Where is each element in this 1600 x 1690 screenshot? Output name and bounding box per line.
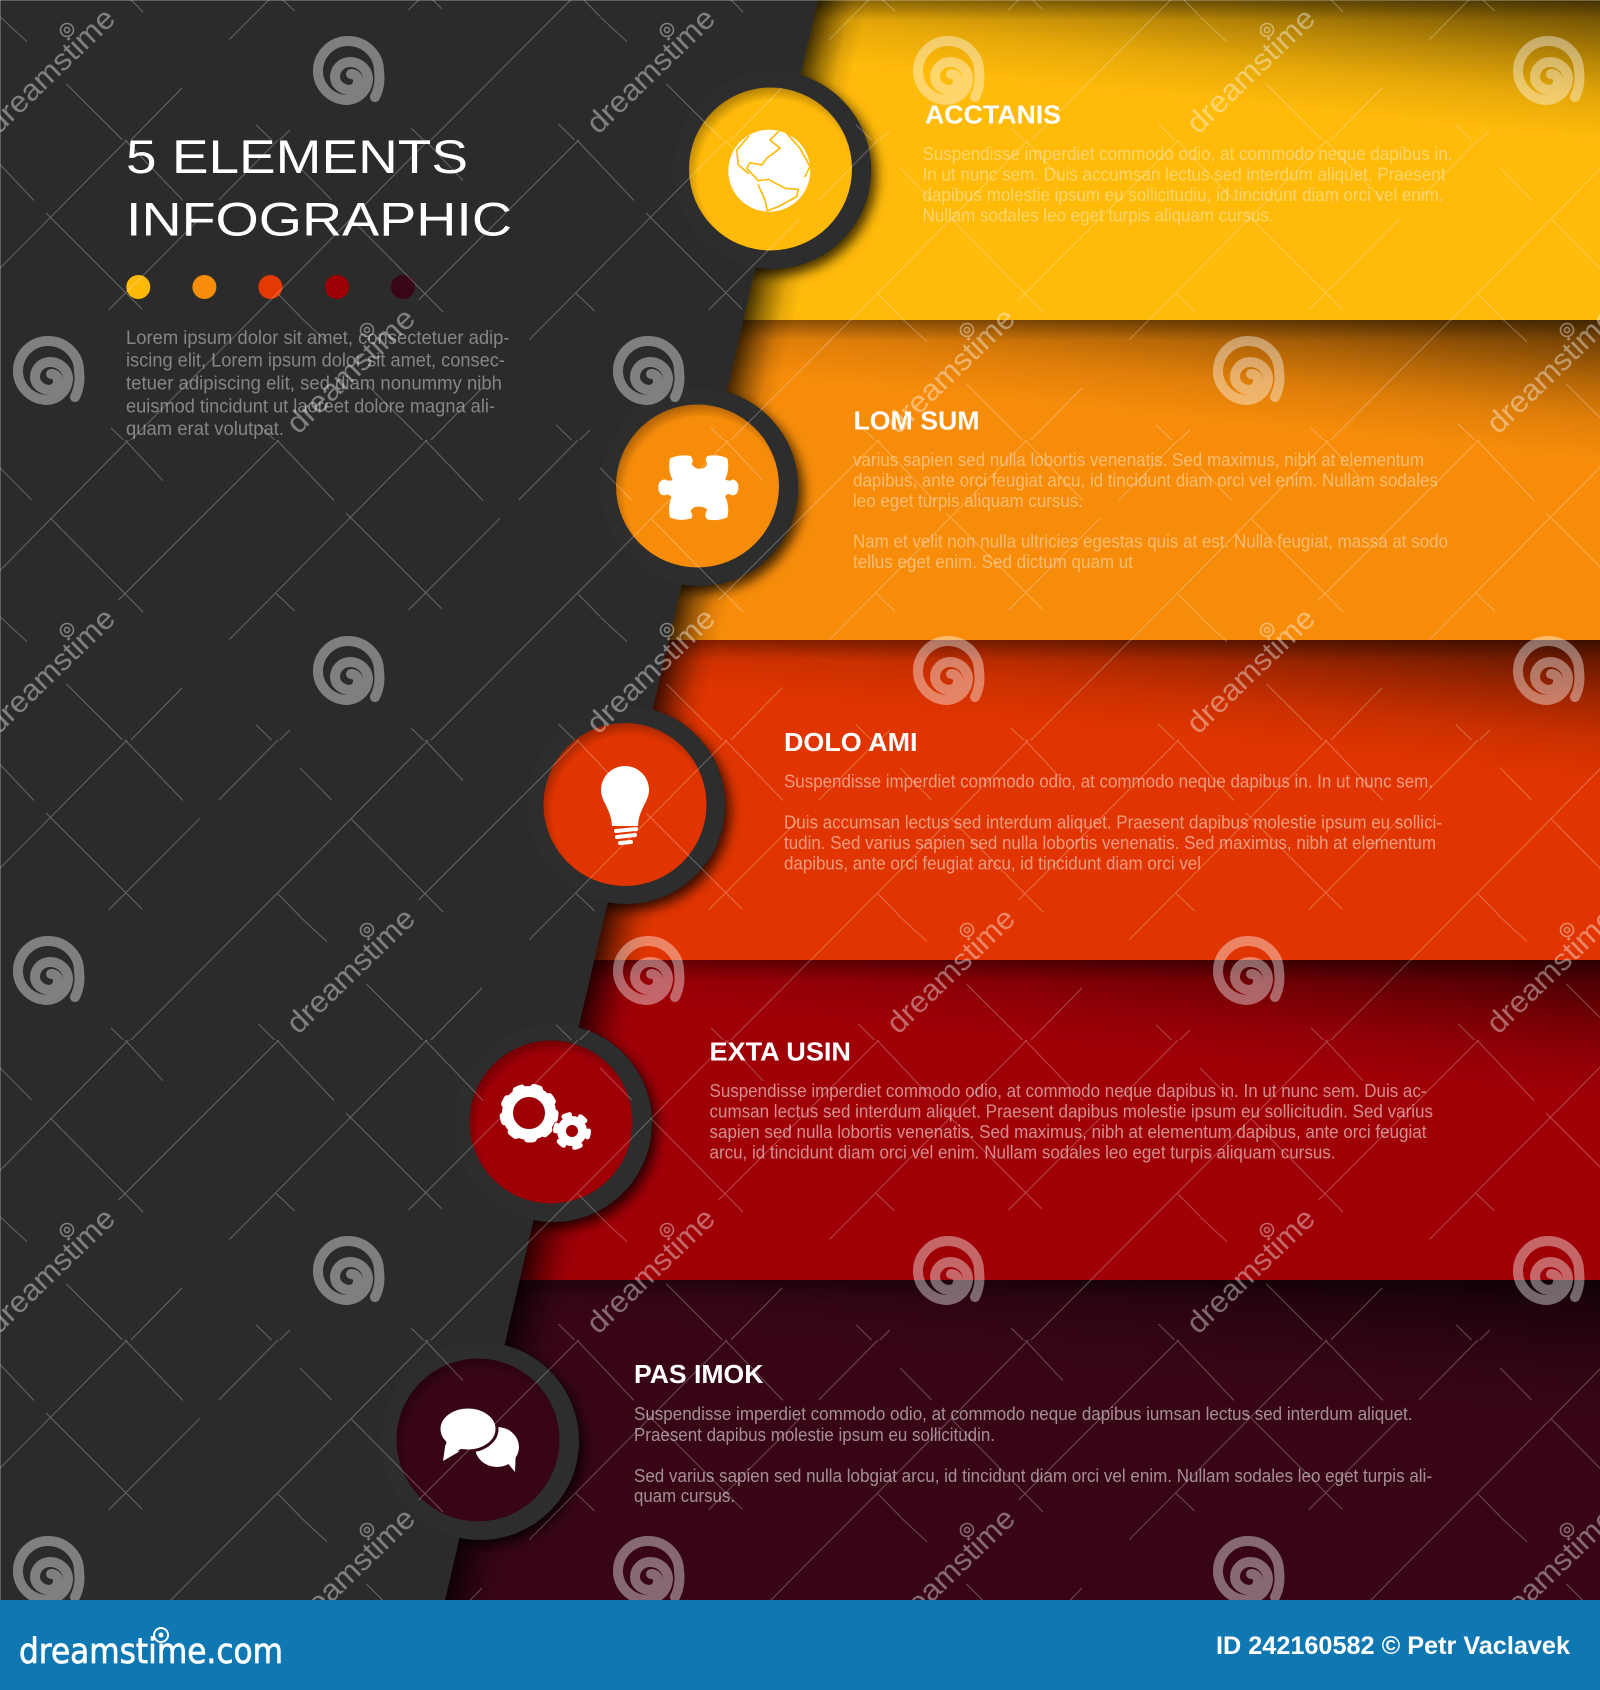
text block: intro: quam erat volutpat.: [126, 418, 284, 440]
colour dots legend: [126, 275, 415, 299]
text block: intro: Lorem ipsum dolor sit amet, consectetuer adip-: [126, 327, 510, 349]
text block: EXTA USIN body: sapien sed nulla lobortis venenatis. Sed maximus, nibh at elementum dapibus, ante orci feugiat: [710, 1122, 1426, 1142]
text block: intro: [126, 327, 510, 440]
footer credit: ID 242160582 © Petr Vaclavek: [1216, 1632, 1570, 1660]
circle badge: puzzle: [600, 388, 798, 586]
text block: LOM SUM body: dapibus, ante orci feugiat arcu, id tincidunt diam orci vel enim. Nullam sodales: [853, 470, 1438, 490]
text block: EXTA USIN body: cumsan lectus sed interdum aliquet. Praesent dapibus molestie ipsum eu sollicitudin. Sed varius: [710, 1102, 1433, 1122]
text block: DOLO AMI body: Suspendisse imperdiet commodo odio, at commodo neque dapibus in. In ut nunc sem.: [784, 772, 1433, 792]
text block: PAS IMOK body: Praesent dapibus molestie ipsum eu sollicitudin.: [634, 1425, 995, 1445]
title: 5 ELEMENTS: [126, 130, 468, 183]
icon: light bulb: [601, 766, 649, 843]
heading: EXTA USIN: EXTA USIN: [710, 1036, 851, 1066]
watermark overlay: dreamstime: [280, 902, 422, 1040]
watermark overlay: dreamstime: [280, 302, 422, 440]
watermark overlay: dreamstime: [1180, 1202, 1322, 1340]
watermark overlay: dreamstime: [580, 602, 722, 740]
title: [126, 130, 512, 246]
text block: DOLO AMI body: dapibus, ante orci feugiat arcu, id tincidunt diam orci vel: [784, 854, 1201, 874]
text block: intro: iscing elit, Lorem ipsum dolor sit amet, consec-: [126, 350, 505, 372]
text block: DOLO AMI body: [784, 772, 1442, 874]
footer logo: dreamstime.com: [19, 1632, 283, 1672]
watermark overlay: dreamstime: [580, 2, 722, 140]
text block: ACCTANIS body: Suspendisse imperdiet commodo odio, at commodo neque dapibus in.: [922, 144, 1452, 164]
text block: ACCTANIS body: dapibus molestie ipsum eu sollicitudiu, id tincidunt diam orci vel enim.: [922, 185, 1444, 205]
text block: EXTA USIN body: [710, 1081, 1433, 1162]
text block: LOM SUM body: Nam et velit non nulla ultricies egestas quis at est. Nulla feugiat, massa at sodo: [853, 532, 1448, 552]
watermark overlay: dreamstime: [280, 1502, 422, 1640]
band: ACCTANIS: [743, 0, 1600, 320]
heading: DOLO AMI: DOLO AMI: [784, 727, 918, 757]
band: DOLO AMI: [594, 640, 1600, 960]
watermark overlay: dreamstime: [880, 902, 1022, 1040]
watermark overlay: dreamstime: [580, 1202, 722, 1340]
icon: globe: [728, 130, 810, 212]
heading: PAS IMOK: PAS IMOK: [634, 1359, 764, 1389]
band: LOM SUM: [669, 320, 1600, 640]
watermark overlay: dreamstime: [880, 302, 1022, 440]
text block: ACCTANIS body: In ut nunc sem. Duis accumsan lectus sed interdum aliquet. Praesent: [922, 164, 1446, 184]
icon: gears: [503, 1087, 588, 1148]
footer bar: [0, 1600, 1600, 1690]
icon: speech bubbles: [439, 1407, 519, 1472]
text block: PAS IMOK body: Suspendisse imperdiet commodo odio, at commodo neque dapibus iumsan lectus sed interdum aliquet.: [634, 1404, 1412, 1424]
panel: dark left side: [0, 0, 818, 1600]
text block: ACCTANIS body: Nullam sodales leo eget turpis aliquam cursus.: [922, 206, 1274, 226]
text block: LOM SUM body: [853, 450, 1448, 572]
circle badge: chat: [381, 1342, 579, 1540]
band: EXTA USIN: [520, 960, 1600, 1280]
text block: LOM SUM body: leo eget turpis aliquam cursus.: [853, 491, 1083, 511]
circle badge: light bulb: [527, 706, 725, 904]
text block: LOM SUM body: varius sapien sed nulla lobortis venenatis. Sed maximus, nibh at elementum: [853, 450, 1424, 470]
circle badge: gears: [454, 1024, 652, 1222]
heading: ACCTANIS: ACCTANIS: [925, 100, 1061, 130]
circle badge: globe: [673, 71, 871, 269]
text block: intro: euismod tincidunt ut laoreet dolore magna ali-: [126, 395, 495, 417]
title: INFOGRAPHIC: [126, 192, 512, 246]
text block: DOLO AMI body: tudin. Sed varius sapien sed nulla lobortis venenatis. Sed maximus, nibh at elementum: [784, 833, 1436, 853]
watermark overlay: dreamstime: [1180, 602, 1322, 740]
text block: PAS IMOK body: Sed varius sapien sed nulla lobgiat arcu, id tincidunt diam orci vel enim. Nullam sodales leo eget turpis ali-: [634, 1466, 1432, 1486]
band: PAS IMOK: [445, 1280, 1600, 1600]
text block: DOLO AMI body: Duis accumsan lectus sed interdum aliquet. Praesent dapibus molestie ipsum eu sollici-: [784, 812, 1442, 832]
watermark overlay: dreamstime: [1180, 2, 1322, 140]
watermark overlay: dreamstime: [880, 1502, 1022, 1640]
text block: EXTA USIN body: Suspendisse imperdiet commodo odio, at commodo neque dapibus in. In ut nunc sem. Duis ac-: [710, 1081, 1426, 1101]
text block: EXTA USIN body: arcu, id tincidunt diam orci vel enim. Nullam sodales leo eget turpis aliquam cursus.: [710, 1142, 1336, 1162]
text block: ACCTANIS body: [922, 144, 1452, 226]
text block: intro: tetuer adipiscing elit, sed diam nonummy nibh: [126, 372, 502, 394]
icon: puzzle piece: [658, 455, 738, 520]
text block: LOM SUM body: tellus eget enim. Sed dictum quam ut: [853, 552, 1133, 572]
text block: PAS IMOK body: quam cursus.: [634, 1486, 735, 1506]
heading: LOM SUM: LOM SUM: [854, 406, 980, 436]
text block: PAS IMOK body: [634, 1404, 1432, 1506]
